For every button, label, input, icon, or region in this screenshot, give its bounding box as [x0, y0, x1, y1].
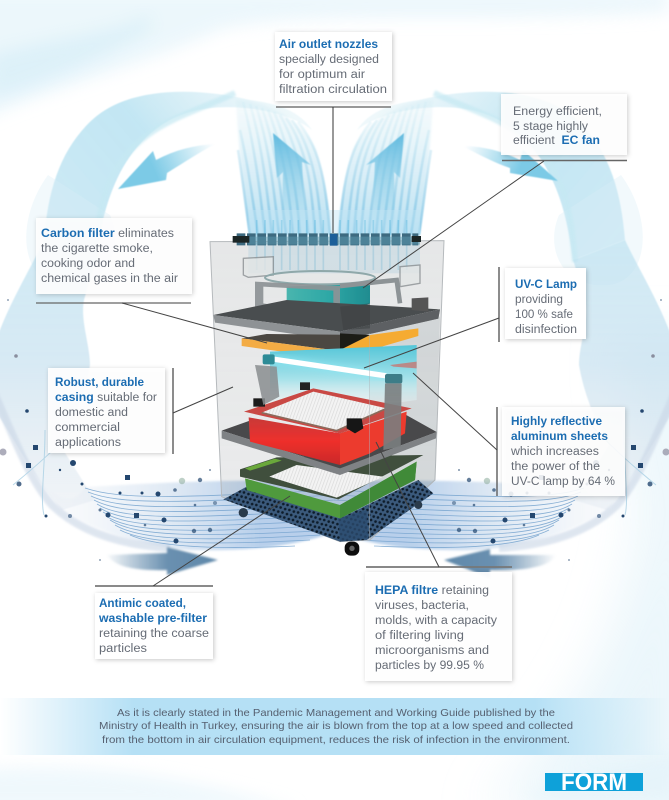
- wheel: [345, 542, 359, 556]
- callout: carbon filter: [36, 218, 267, 343]
- callout: pre-filter: particles: [99, 643, 147, 655]
- nozzles: [233, 234, 421, 246]
- callout: reflective aluminum sheets: [413, 373, 625, 496]
- UV-C lamp: [263, 354, 402, 383]
- callout: EC fan: 5 stage highly: [513, 121, 588, 133]
- bottom note banner: [0, 698, 669, 755]
- callout: UV-C lamp: providing: [515, 294, 563, 306]
- bottom note banner: As it is clearly stated in the Pandemic Management and Working Guide published by the: [117, 707, 555, 719]
- callout: robust casing: commercial: [55, 422, 120, 434]
- callout: air outlet nozzles: for optimum air: [279, 69, 365, 81]
- lamp posts: [255, 365, 402, 450]
- pre-filter: [240, 455, 423, 518]
- arrow: left downward: [118, 144, 215, 189]
- arrow: bottom left: [107, 547, 218, 575]
- callout: EC fan: efficient EC fan: [513, 135, 600, 147]
- arrow: right downward: [462, 146, 558, 181]
- callout: robust casing: applications: [55, 437, 121, 449]
- FORM logo: FORM: [561, 769, 627, 796]
- callout: HEPA filter: [365, 442, 512, 681]
- callout: carbon filter: cooking odor and: [41, 258, 135, 270]
- arrow: right outlet upward: [366, 133, 404, 238]
- bottom note banner: Ministry of Health in Turkey, ensuring the air is blown from the top at a low speed and collected: [99, 720, 573, 732]
- callout: air outlet nozzles: Air outlet nozzles: [279, 39, 378, 51]
- right casing face: [370, 317, 440, 540]
- outlet air strands: [248, 210, 420, 273]
- top plate: [213, 297, 440, 341]
- red reflection on sheet: [390, 362, 417, 368]
- callout: UV-C lamp: UV-C Lamp: [515, 279, 577, 291]
- callout: robust casing: casing suitable for: [55, 392, 157, 404]
- callout: HEPA filter: HEPA filtre retaining: [375, 585, 489, 597]
- air flow and particles: right side: [334, 92, 669, 561]
- casing front edge: [368, 333, 370, 540]
- casing back: [210, 241, 444, 542]
- callout: reflective aluminum sheets: UV-C lamp by 64 %: [511, 476, 615, 488]
- callout: HEPA filter: microorganisms and: [375, 645, 489, 657]
- callout: robust casing: domestic and: [55, 407, 128, 419]
- callout: carbon filter: Carbon filter eliminates: [41, 228, 174, 240]
- mid plate: [222, 413, 437, 475]
- callout: reflective aluminum sheets: the power of the: [511, 461, 600, 473]
- callout: pre-filter: washable pre-filter: [98, 613, 208, 625]
- bottom note banner: from the bottom in air circulation equipment, reduces the risk of infection in the environment.: [102, 734, 570, 746]
- callout: HEPA filter: viruses, bacteria,: [375, 600, 469, 612]
- callout: reflective aluminum sheets: aluminum sheets: [511, 431, 608, 443]
- callout: robust casing: Robust, durable: [55, 377, 144, 389]
- reflective aluminum sheets: [270, 345, 417, 407]
- callout: EC fan: Energy efficient,: [513, 106, 602, 118]
- perforated base: [223, 480, 433, 542]
- carbon filter: [242, 328, 418, 359]
- callout: pre-filter: Antimic coated,: [99, 598, 186, 610]
- callout: UV-C lamp: disinfection: [515, 324, 577, 336]
- arrow: left outlet upward: [273, 133, 311, 238]
- callout: robust casing: [48, 368, 233, 454]
- air flow and particles: left side: [0, 92, 335, 561]
- callout: UV-C lamp: [364, 267, 586, 368]
- arrow: bottom right: [444, 549, 556, 578]
- callout: UV-C lamp: 100 % safe: [515, 309, 573, 321]
- callout: pre-filter: [95, 496, 290, 659]
- callout: pre-filter: retaining the coarse: [99, 628, 209, 640]
- callout: air outlet nozzles: [275, 32, 392, 233]
- callout: reflective aluminum sheets: Highly reflective: [511, 416, 602, 428]
- callout: air outlet nozzles: filtration circulation: [279, 84, 387, 96]
- callout: EC fan: [363, 94, 627, 288]
- callout: carbon filter: chemical gases in the air: [41, 273, 178, 285]
- fan slots: [243, 257, 420, 287]
- callout: HEPA filter: molds, with a capacity: [375, 615, 497, 627]
- callout: carbon filter: the cigarette smoke,: [41, 243, 153, 255]
- purifier machine: [210, 210, 444, 556]
- HEPA filter: [244, 382, 412, 465]
- callout: HEPA filter: of filtering living: [375, 630, 464, 642]
- callout: reflective aluminum sheets: which increases: [510, 446, 599, 458]
- EC fan: [255, 271, 400, 320]
- callout: HEPA filter: particles by 99.95 %: [375, 660, 484, 672]
- callout: air outlet nozzles: specially designed: [279, 54, 379, 66]
